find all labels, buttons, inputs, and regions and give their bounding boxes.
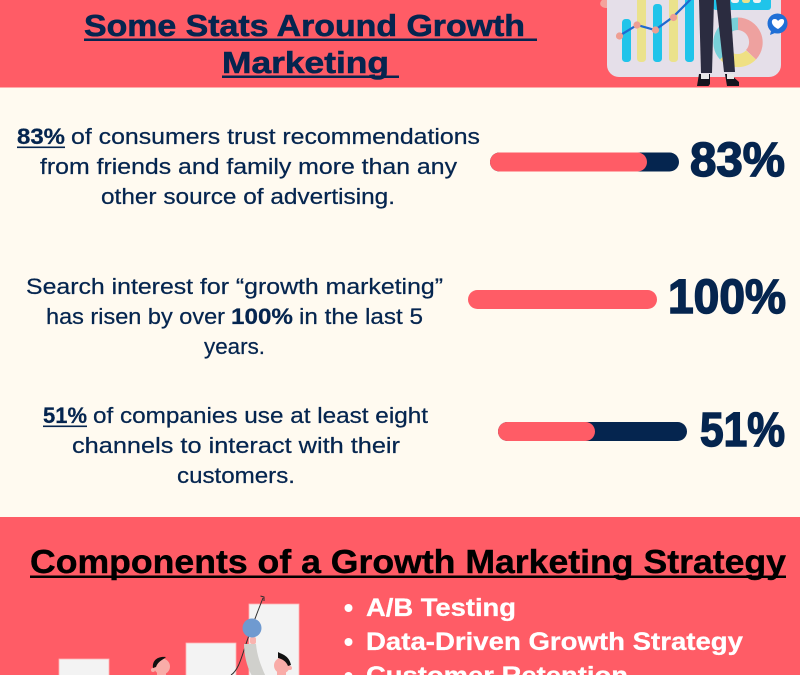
panel: header band [0, 0, 800, 88]
list of components: A/B Testing [366, 594, 516, 622]
stat 2 progress bar [468, 290, 657, 309]
icon: dashboard illustration with person [600, 0, 788, 86]
title [84, 8, 537, 80]
stat 1 text: from friends and family more than any [40, 154, 457, 179]
stat 3 progress bar [498, 422, 687, 441]
stat 2 text: 100% [231, 304, 293, 329]
stat 3 text: 51% [43, 403, 87, 428]
stat 1 text [17, 124, 480, 209]
panel: components of strategy [0, 517, 800, 675]
stat 3 text [43, 403, 428, 488]
stat 3 text: customers. [177, 463, 295, 488]
stat 1 text: 83% [17, 124, 65, 149]
stat 2 text: in the last 5 [299, 304, 423, 329]
stat 2 text [26, 274, 443, 359]
stat 1 progress bar [490, 152, 679, 172]
stat 3 number: 51% [700, 404, 785, 457]
illustration: team and growth chart [59, 596, 299, 675]
title: Some Stats Around Growth [84, 8, 525, 43]
list of components [344, 594, 743, 675]
heading: components: Components of a Growth Marketing Strategy [30, 543, 787, 580]
stat 1 text: of consumers trust recommendations [71, 124, 480, 149]
stat 2 text: has risen by over [46, 304, 225, 329]
stat 2 text: Search interest for “growth marketing” [26, 274, 443, 299]
stat 1 number: 83% [690, 134, 785, 187]
list of components: Data-Driven Growth Strategy [366, 628, 743, 656]
stat 2 text: years. [204, 334, 265, 359]
title: Marketing [222, 45, 389, 80]
stat 3 text: of companies use at least eight [93, 403, 428, 428]
stat 1 text: other source of advertising. [101, 184, 395, 209]
stat 3 text: channels to interact with their [72, 433, 400, 458]
stat 2 number: 100% [668, 271, 786, 324]
